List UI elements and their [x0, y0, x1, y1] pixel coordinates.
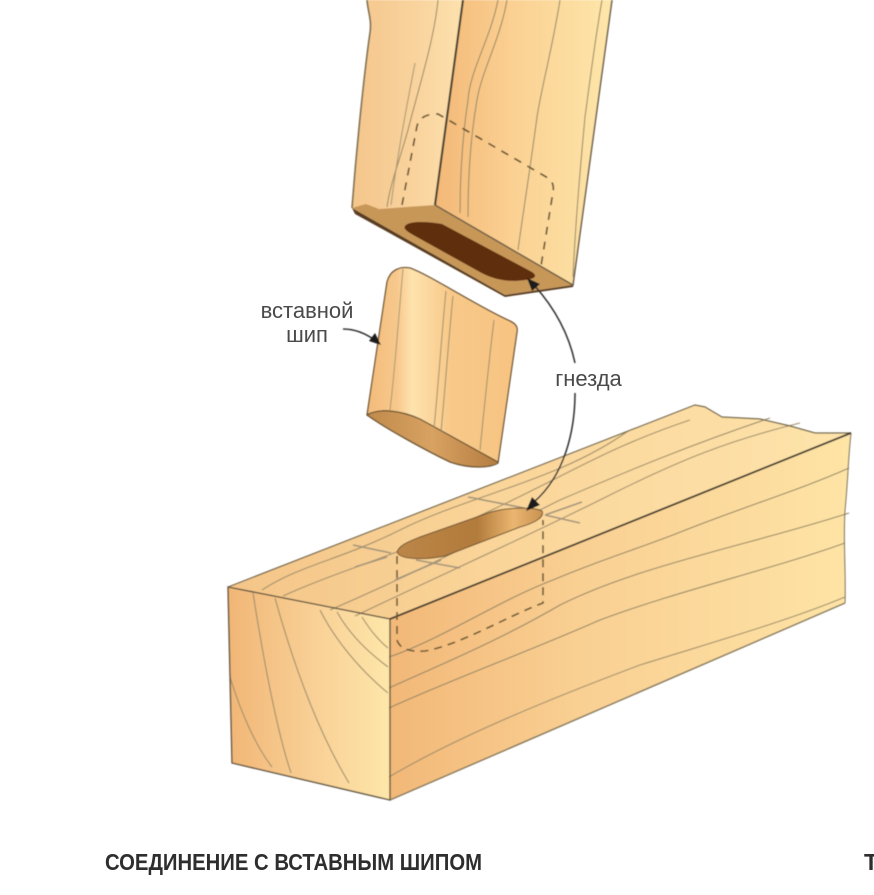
wooden joint illustration [228, 0, 851, 800]
lower timber with mortise [228, 405, 851, 800]
label: вставной шип [261, 298, 353, 347]
hidden mortise outline [402, 114, 553, 266]
title: СОЕДИНЕНИЕ С ВСТАВНЫМ ШИПОМ [105, 849, 482, 875]
arrow: lower mortise [526, 393, 575, 511]
upper timber with mortise [352, 0, 612, 297]
arrow: tenon [343, 329, 381, 345]
label: вставной шип: вставной [261, 298, 353, 323]
lower mortise [397, 508, 543, 559]
layout marks [353, 497, 582, 580]
label: гнезда: гнезда [555, 366, 623, 391]
arrow: upper mortise [527, 278, 575, 363]
label: вставной шип: шип [286, 322, 328, 347]
hidden mortise outline [397, 520, 543, 651]
loose tenon [367, 268, 517, 467]
